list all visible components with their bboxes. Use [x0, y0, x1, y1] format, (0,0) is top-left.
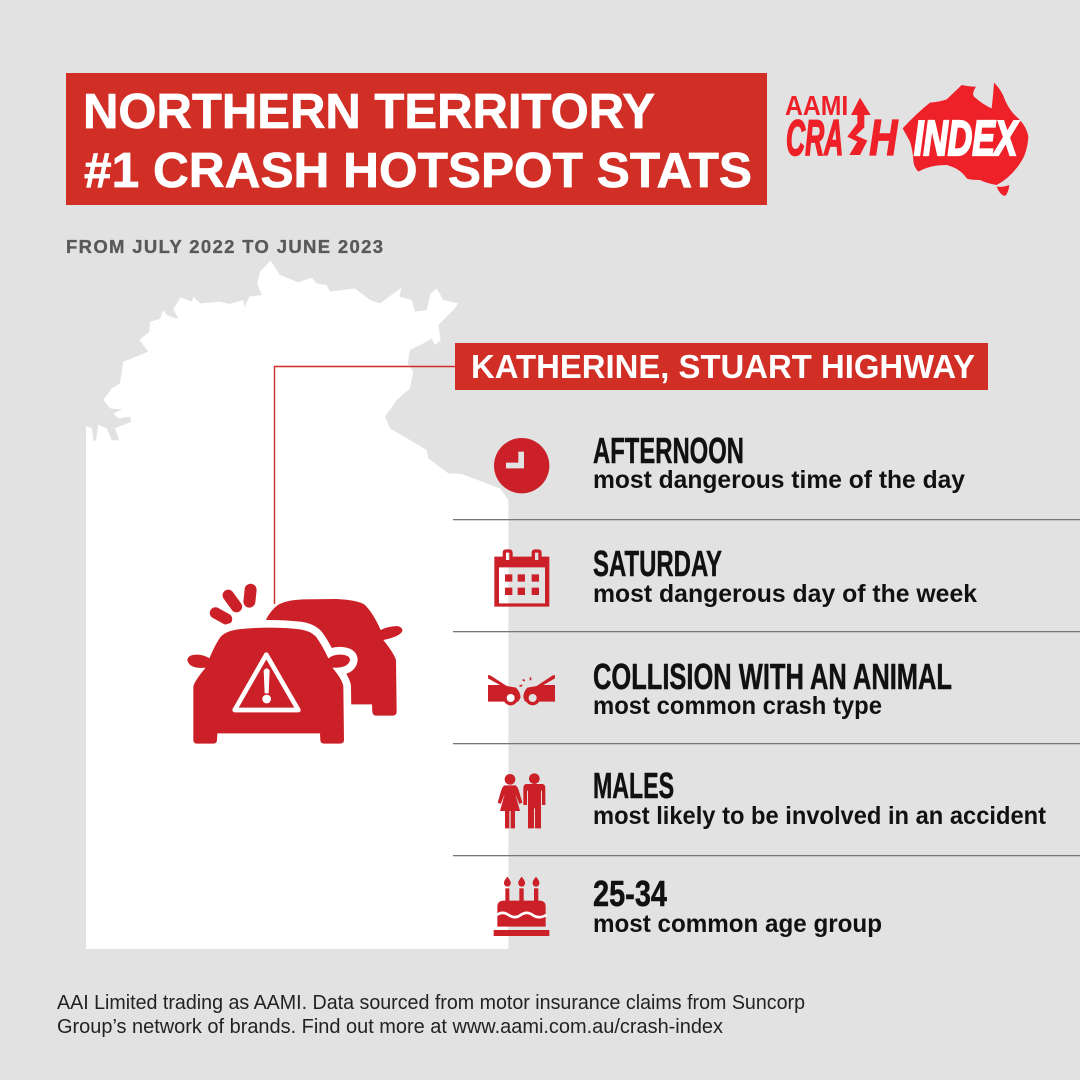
logo: AAMI Crash Index: CRA	[786, 110, 843, 166]
logo: AAMI Crash Index: AAMI	[785, 90, 848, 121]
stat: gender: MALES	[593, 765, 674, 806]
date range subtitle: FROM JULY 2022 TO JUNE 2023	[66, 236, 383, 257]
location heading: Katherine, Stuart Highway: KATHERINE, STUART HIGHWAY	[471, 348, 975, 385]
footer source note: Group’s network of brands. Find out more at www.aami.com.au/crash-index	[57, 1015, 724, 1038]
icon: clock	[494, 438, 549, 493]
icon: calendar	[494, 549, 549, 607]
stat: crash type: most common crash type	[593, 692, 882, 720]
icon: front car	[187, 628, 350, 744]
logo: AAMI Crash Index: INDEX	[914, 111, 1019, 166]
title banner: #1 CRASH HOTSPOT STATS	[84, 144, 752, 198]
warning triangle	[235, 655, 298, 710]
stat: day of week: most dangerous day of the week	[593, 580, 977, 608]
stat: time of day	[593, 430, 965, 494]
map: Northern Territory	[86, 261, 508, 949]
stat: time of day: most dangerous time of the day	[593, 466, 965, 494]
icon: birthday cake	[494, 877, 549, 936]
stat: age group	[593, 873, 882, 938]
stat: age group: 25-34	[593, 873, 667, 914]
icon: car collision	[488, 675, 555, 705]
icon: man and woman	[498, 773, 545, 828]
stat: time of day: AFTERNOON	[593, 430, 744, 471]
stat: crash type	[593, 656, 952, 720]
icon: crashed cars with warning triangle	[187, 583, 402, 744]
footer source note	[57, 991, 805, 1038]
stat: gender	[593, 765, 1047, 830]
title banner	[66, 73, 767, 205]
logo: AAMI Crash Index	[785, 83, 1028, 196]
connector line	[274, 366, 456, 604]
title banner: NORTHERN TERRITORY	[83, 85, 655, 139]
footer source note: AAI Limited trading as AAMI. Data sourced from motor insurance claims from Suncorp	[57, 991, 805, 1014]
stat: gender: most likely to be involved in an accident	[593, 802, 1047, 830]
stat: age group: most common age group	[593, 910, 882, 938]
impact marks	[208, 583, 257, 627]
logo: AAMI Crash Index: H	[869, 110, 898, 166]
icon: rear car	[266, 599, 402, 716]
stat: day of week: SATURDAY	[593, 543, 722, 584]
stat: day of week	[593, 543, 977, 608]
row separators	[453, 519, 1080, 856]
